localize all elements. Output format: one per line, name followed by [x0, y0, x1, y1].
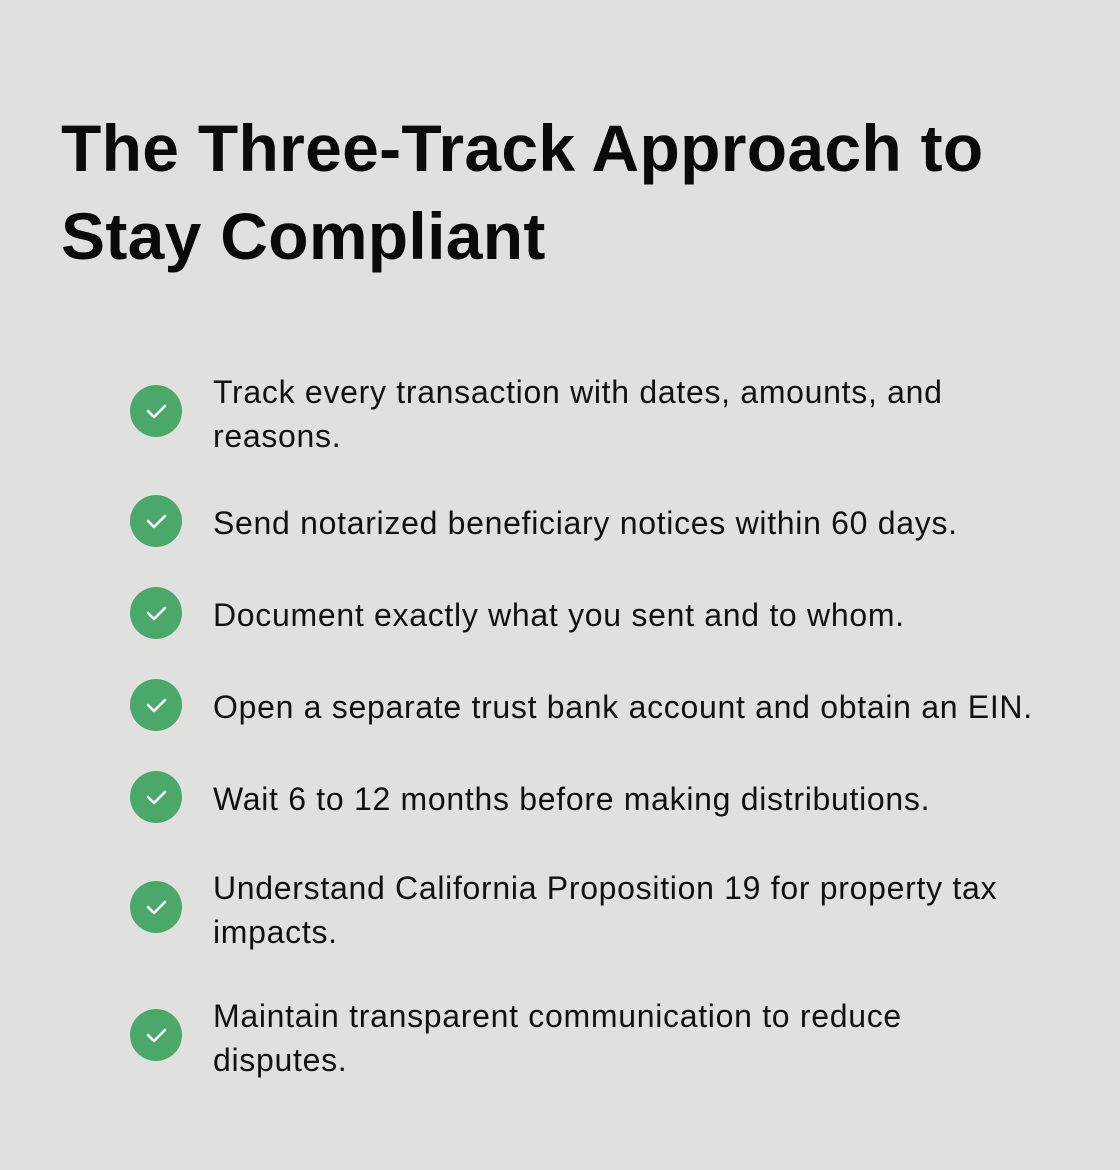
icon: check: [130, 771, 182, 823]
text: Send notarized beneficiary notices within 60 days.: [213, 505, 958, 541]
text: [213, 870, 997, 950]
icon: check: [130, 881, 182, 933]
text: [213, 374, 943, 454]
text: Wait 6 to 12 months before making distributions.: [213, 781, 930, 817]
icon: check: [130, 1009, 182, 1061]
text: Understand California Proposition 19 for property tax: [213, 870, 997, 906]
item 5: [130, 771, 930, 823]
item 6: [130, 870, 997, 950]
text: reasons.: [213, 418, 341, 454]
text: [213, 998, 902, 1078]
title: [61, 111, 984, 273]
icon: check: [130, 587, 182, 639]
item 2: [130, 495, 958, 547]
item 3: [130, 587, 905, 639]
text: Open a separate trust bank account and obtain an EIN.: [213, 689, 1033, 725]
item 4: [130, 679, 1033, 731]
text: Track every transaction with dates, amounts, and: [213, 374, 943, 410]
icon: check: [130, 385, 182, 437]
item 7: [130, 998, 902, 1078]
text: impacts.: [213, 914, 338, 950]
text: disputes.: [213, 1042, 347, 1078]
title: Stay Compliant: [61, 199, 546, 273]
icon: check: [130, 495, 182, 547]
item 1: [130, 374, 943, 454]
text: Maintain transparent communication to reduce: [213, 998, 902, 1034]
text: Document exactly what you sent and to whom.: [213, 597, 905, 633]
icon: check: [130, 679, 182, 731]
title: The Three-Track Approach to: [61, 111, 984, 185]
